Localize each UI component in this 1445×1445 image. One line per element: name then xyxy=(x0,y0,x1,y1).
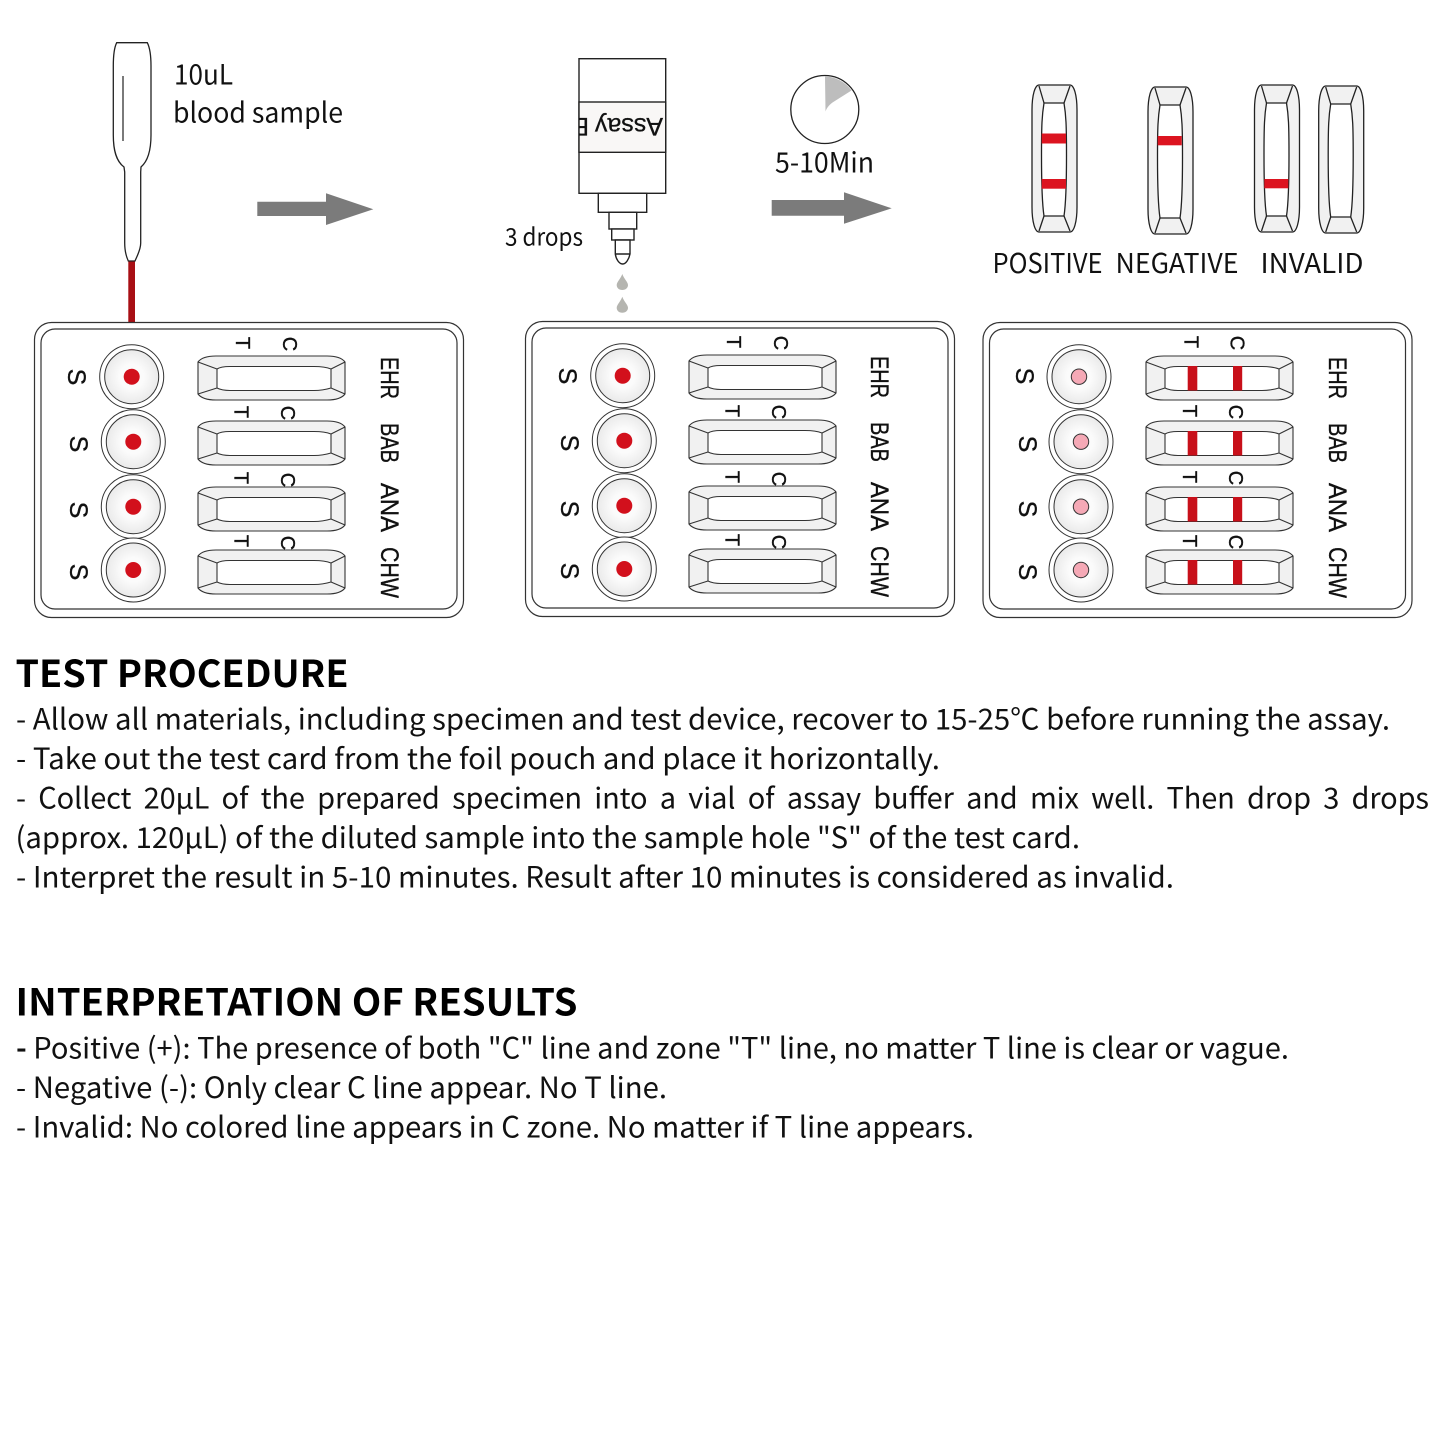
strip names: BAB xyxy=(1323,423,1351,463)
well and strip letters: S xyxy=(555,501,583,517)
test strips xyxy=(689,355,836,593)
well and strip letters: C xyxy=(769,336,791,350)
icon: timer clock xyxy=(791,76,859,144)
text block: interpretation rules: - Positive (+): The presence of both "C" line and zone "T" line, no matter T line is clear or vague. xyxy=(16,1026,1289,1068)
strip names: ANA xyxy=(1323,483,1351,532)
test strips xyxy=(198,356,345,594)
well and strip letters: S xyxy=(1010,368,1038,384)
panel: test card after adding buffer drops xyxy=(526,322,954,616)
strip names: CHW xyxy=(375,547,403,598)
strip names xyxy=(1323,357,1351,598)
strip names: EHR xyxy=(1323,357,1351,399)
well and strip letters: T xyxy=(720,471,742,483)
result labels: POSITIVE xyxy=(992,242,1102,281)
strip names xyxy=(865,356,893,597)
well and strip letters: T xyxy=(722,336,744,348)
result strip: invalid with no lines xyxy=(1319,86,1364,233)
well and strip letters: T xyxy=(230,406,252,418)
well and strip letters: T xyxy=(1178,535,1200,547)
strip names: EHR xyxy=(865,356,893,398)
strip names xyxy=(375,357,403,598)
strip names: EHR xyxy=(375,357,403,399)
well and strip letters: S xyxy=(555,563,583,579)
text block: interpretation rules: - Negative (-): Only clear C line appear. No T line. xyxy=(16,1065,667,1107)
label: 10uL blood sample xyxy=(173,54,343,132)
icon: assay buffer bottle: Assay B xyxy=(572,112,663,140)
well and strip letters: T xyxy=(230,535,252,547)
well and strip letters: C xyxy=(767,405,789,419)
well and strip letters: C xyxy=(1224,535,1246,549)
well and strip letters: T xyxy=(720,405,742,417)
strip names: BAB xyxy=(375,423,403,463)
heading: interpretation of results: INTERPRETATION OF RESULTS xyxy=(16,972,577,1026)
text block: interpretation rules: - Invalid: No colored line appears in C zone. No matter if T line appears. xyxy=(16,1105,974,1147)
well and strip letters: C xyxy=(278,337,300,351)
well and strip letters: T xyxy=(231,337,253,349)
well and strip letters: C xyxy=(276,536,298,550)
sample wells xyxy=(100,345,165,602)
text block: procedure steps: - Interpret the result in 5-10 minutes. Result after 10 minutes is considered as invalid. xyxy=(16,855,1174,897)
well and strip letters: T xyxy=(1178,471,1200,483)
heading: test procedure: TEST PROCEDURE xyxy=(16,644,348,698)
label: 10uL blood sample: 10uL xyxy=(174,54,233,94)
result labels: INVALID xyxy=(1260,242,1364,281)
strip names: CHW xyxy=(865,546,893,597)
icon: falling drops xyxy=(617,274,628,313)
well and strip letters: C xyxy=(1226,336,1248,350)
label: 5-10Min: 5-10Min xyxy=(775,142,874,182)
well and strip letters: S xyxy=(555,435,583,451)
strip names: ANA xyxy=(865,482,893,531)
result strip: positive xyxy=(1032,85,1077,232)
well and strip letters: S xyxy=(1013,501,1041,517)
panel: test card with developed result xyxy=(983,322,1412,618)
arrow: step two to step three xyxy=(772,192,892,224)
sample wells xyxy=(591,344,656,601)
well and strip letters: S xyxy=(64,564,92,580)
well and strip letters: C xyxy=(767,535,789,549)
well and strip letters xyxy=(553,336,791,579)
well and strip letters: C xyxy=(767,472,789,486)
well and strip letters: S xyxy=(64,502,92,518)
well and strip letters xyxy=(62,337,300,580)
well and strip letters: T xyxy=(720,534,742,546)
text block: procedure steps: - Take out the test card from the foil pouch and place it horizontally. xyxy=(16,736,940,778)
text block: interpretation rules xyxy=(16,1026,1289,1147)
well and strip letters: T xyxy=(1178,405,1200,417)
text block: procedure steps: (approx. 120μL) of the diluted sample into the sample hole "S" of the test card. xyxy=(16,815,1080,857)
strip names: ANA xyxy=(375,483,403,532)
well and strip letters: S xyxy=(553,368,581,384)
label: 10uL blood sample: blood sample xyxy=(173,92,343,132)
well and strip letters: S xyxy=(1013,564,1041,580)
text block: procedure steps xyxy=(16,697,1429,897)
result labels xyxy=(992,242,1364,281)
result labels: NEGATIVE xyxy=(1116,242,1238,281)
well and strip letters: C xyxy=(1224,405,1246,419)
result strip: invalid with T line only xyxy=(1254,85,1300,232)
label: 3 drops: 3 drops xyxy=(505,218,583,252)
panel: test card after adding blood sample xyxy=(34,322,464,618)
well and strip letters: T xyxy=(1180,336,1202,348)
well and strip letters: S xyxy=(62,369,90,385)
well and strip letters: T xyxy=(230,472,252,484)
well and strip letters: C xyxy=(1224,471,1246,485)
well and strip letters: C xyxy=(276,473,298,487)
icon: pipette with blood sample xyxy=(113,43,151,341)
well and strip letters: S xyxy=(64,436,92,452)
result strip: negative xyxy=(1148,87,1193,234)
well and strip letters xyxy=(1010,336,1248,580)
strip names: BAB xyxy=(865,422,893,462)
sample wells xyxy=(1047,345,1113,602)
strip names: CHW xyxy=(1323,547,1351,598)
icon: assay buffer bottle xyxy=(572,59,666,264)
well and strip letters: S xyxy=(1013,436,1041,452)
text block: procedure steps: - Collect 20μL of the prepared specimen into a vial of assay buffer and mix well. Then drop 3 drops xyxy=(16,776,1429,818)
arrow: step one to step two xyxy=(257,193,373,225)
test strips with T and C lines xyxy=(1146,356,1293,594)
well and strip letters: C xyxy=(276,406,298,420)
text block: procedure steps: - Allow all materials, including specimen and test device, recover to 15-25℃ before running the assay. xyxy=(16,697,1390,739)
